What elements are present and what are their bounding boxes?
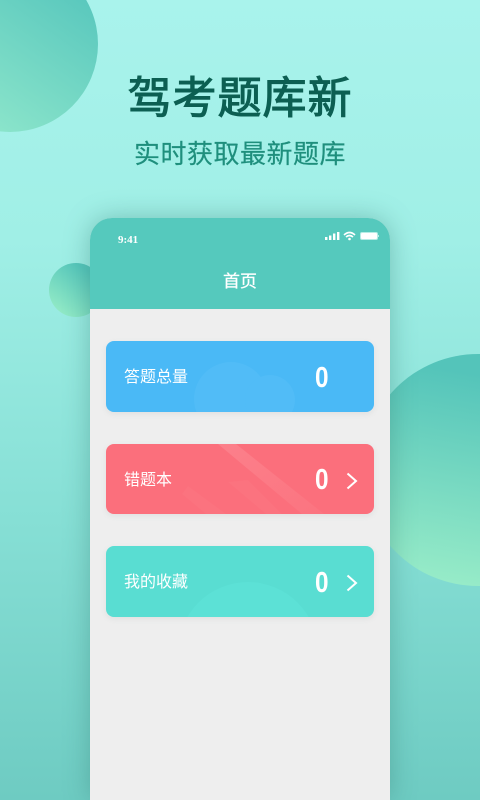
status bar time: 9:41 — [118, 234, 138, 246]
status bar icons — [325, 232, 379, 240]
decorative circle: right — [362, 354, 480, 586]
title: 驾考题库新 — [128, 74, 352, 123]
arrow — [346, 472, 358, 490]
diagonal stripes decoration — [218, 444, 298, 502]
card: favourites — [106, 546, 374, 617]
screen title: 首页 — [223, 272, 257, 291]
card: total questions — [106, 341, 374, 412]
label: 答题总量 — [124, 369, 188, 386]
card: wrong answers — [106, 444, 374, 514]
count: 0 — [315, 362, 329, 394]
decorative circle: small left — [49, 263, 103, 317]
count: 0 — [315, 567, 329, 599]
label: 错题本 — [124, 472, 172, 489]
count: 0 — [315, 464, 329, 496]
panel: phone mockup — [90, 218, 390, 800]
label: 我的收藏 — [124, 574, 188, 591]
arc decoration — [106, 546, 374, 617]
arrow — [346, 574, 358, 592]
cloud decoration — [106, 341, 374, 412]
subtitle: 实时获取最新题库 — [134, 139, 346, 169]
decorative circle: top left — [0, 0, 98, 132]
phone header bar — [90, 218, 390, 309]
